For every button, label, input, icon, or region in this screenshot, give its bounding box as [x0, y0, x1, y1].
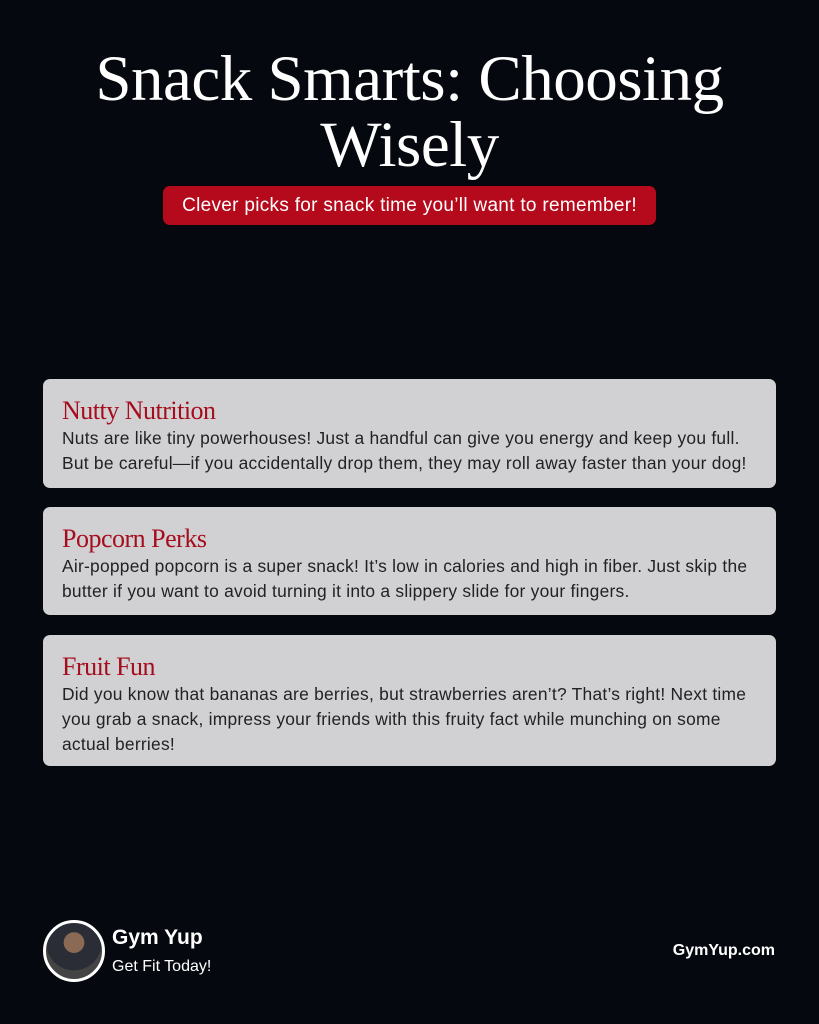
- body text: But be careful—if you accidentally drop them, they may roll away faster than your dog!: [62, 453, 747, 473]
- title: [95, 43, 724, 181]
- card: popcorn perks: [43, 507, 776, 615]
- title: Snack Smarts: Choosing: [95, 43, 724, 115]
- heading: Fruit Fun: [62, 652, 155, 681]
- heading: Popcorn Perks: [62, 524, 206, 553]
- brand name: Gym Yup: [112, 926, 203, 949]
- body text: Did you know that bananas are berries, but strawberries aren’t? That’s right! Next time: [62, 684, 746, 704]
- subtitle pill: [163, 186, 656, 225]
- tagline: Get Fit Today!: [112, 958, 211, 975]
- body text: Nuts are like tiny powerhouses! Just a handful can give you energy and keep you full.: [62, 428, 740, 448]
- body text: butter if you want to avoid turning it into a slippery slide for your fingers.: [62, 581, 630, 601]
- card: nutty nutrition: [43, 379, 776, 488]
- body text: [62, 556, 747, 601]
- body text: you grab a snack, impress your friends with this fruity fact while munching on some: [62, 709, 721, 729]
- body text: [62, 428, 747, 473]
- body text: [62, 684, 746, 754]
- website: GymYup.com: [673, 942, 775, 959]
- subtitle pill: Clever picks for snack time you’ll want to remember!: [182, 195, 637, 216]
- icon: avatar: [43, 920, 105, 982]
- body text: actual berries!: [62, 734, 175, 754]
- body text: Air-popped popcorn is a super snack! It’s low in calories and high in fiber. Just skip the: [62, 556, 747, 576]
- heading: Nutty Nutrition: [62, 396, 216, 425]
- title: Wisely: [320, 109, 499, 181]
- card: fruit fun: [43, 635, 776, 766]
